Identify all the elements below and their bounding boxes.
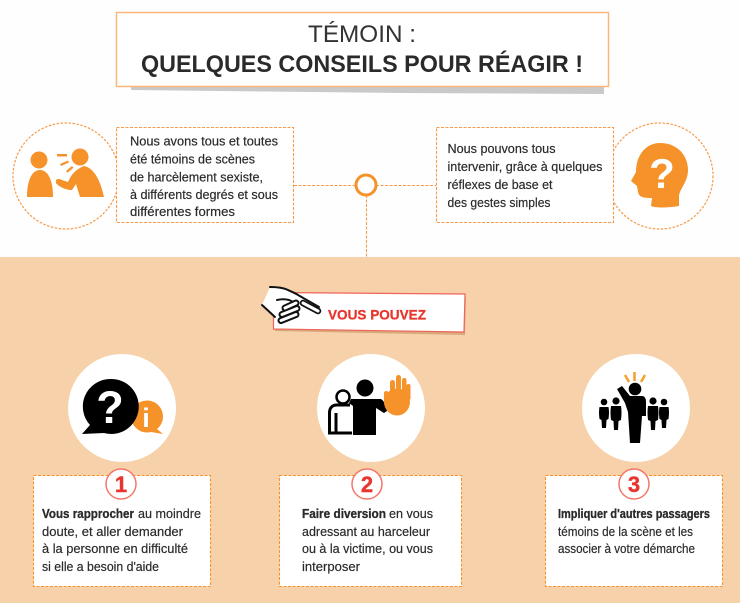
panel: step 2 — [280, 354, 462, 586]
icon: head with question mark — [631, 143, 688, 208]
left text box — [116, 128, 294, 222]
banner: vous pouvez — [262, 287, 466, 335]
text 2 — [302, 507, 433, 574]
right dashed circle — [607, 123, 713, 229]
icon: group with raised-arm figure — [599, 372, 669, 443]
right text: réflexes de base et — [448, 178, 553, 192]
left text: différentes formes — [130, 205, 235, 219]
connector lines — [294, 186, 436, 257]
number badge 1: 1 — [115, 472, 127, 497]
text 3 — [558, 507, 710, 556]
text 3: Impliquer d'autres passagers — [558, 507, 710, 521]
connector ring — [356, 175, 376, 195]
right text box — [436, 128, 614, 222]
peach background panel — [0, 257, 740, 603]
text 1: Vous rapprocher — [42, 507, 134, 521]
title line 1: TÉMOIN : — [308, 21, 416, 48]
number badge 2 — [352, 469, 382, 499]
text 2: ou à la victime, ou vous — [302, 542, 433, 556]
icon: question and info bubbles — [82, 379, 163, 434]
panel: left statement — [13, 123, 294, 229]
text box 3 — [546, 476, 722, 586]
icon: head with question mark: ? — [649, 150, 675, 197]
text 2: interposer — [302, 560, 360, 574]
left text: de harcèlement sexiste, — [130, 170, 263, 184]
text 1: doute, et aller demander — [42, 525, 183, 539]
left text — [130, 134, 278, 219]
panel: step 3 — [546, 354, 722, 586]
left text: Nous avons tous et toutes — [130, 134, 278, 148]
text 1 — [42, 507, 201, 574]
title box — [116, 12, 608, 94]
left text: été témoins de scènes — [130, 152, 255, 166]
title line 2: QUELQUES CONSEILS POUR RÉAGIR ! — [141, 50, 583, 78]
banner label: VOUS POUVEZ — [328, 306, 426, 322]
right text — [448, 142, 602, 210]
right text: Nous pouvons tous — [448, 142, 556, 156]
text 1: à la personne en difficulté — [42, 542, 188, 556]
number badge 1 — [106, 469, 136, 499]
text box 2 — [280, 476, 462, 586]
icon: question and info bubbles: ? — [96, 382, 124, 433]
white circle 1 — [68, 354, 176, 462]
panel: right statement — [436, 123, 713, 229]
icon: question and info bubbles: i — [142, 403, 150, 433]
panel: step 1 — [34, 354, 210, 586]
number badge 3: 3 — [628, 472, 640, 497]
icon: pointing hand — [262, 287, 321, 325]
white circle 3 — [582, 354, 690, 462]
text 3: témoins de la scène et les — [558, 525, 693, 539]
text 2: en vous — [389, 507, 433, 521]
text 2: Faire diversion — [302, 507, 386, 521]
text 2: adressant au harceleur — [302, 525, 430, 539]
white circle 2 — [317, 354, 425, 462]
right text: intervenir, grâce à quelques — [448, 160, 602, 174]
text 1: au moindre — [138, 507, 201, 521]
text box 1 — [34, 476, 210, 586]
left text: à différents degrés et sous — [130, 188, 278, 202]
right text: des gestes simples — [448, 196, 550, 210]
text 1: si elle a besoin d'aide — [42, 560, 159, 574]
number badge 3 — [619, 469, 649, 499]
icon: two people talking — [27, 148, 104, 197]
number badge 2: 2 — [361, 472, 373, 497]
icon: person interposing with raised hand — [330, 375, 410, 435]
text 3: associer à votre démarche — [558, 542, 695, 556]
left dashed circle — [13, 123, 119, 229]
